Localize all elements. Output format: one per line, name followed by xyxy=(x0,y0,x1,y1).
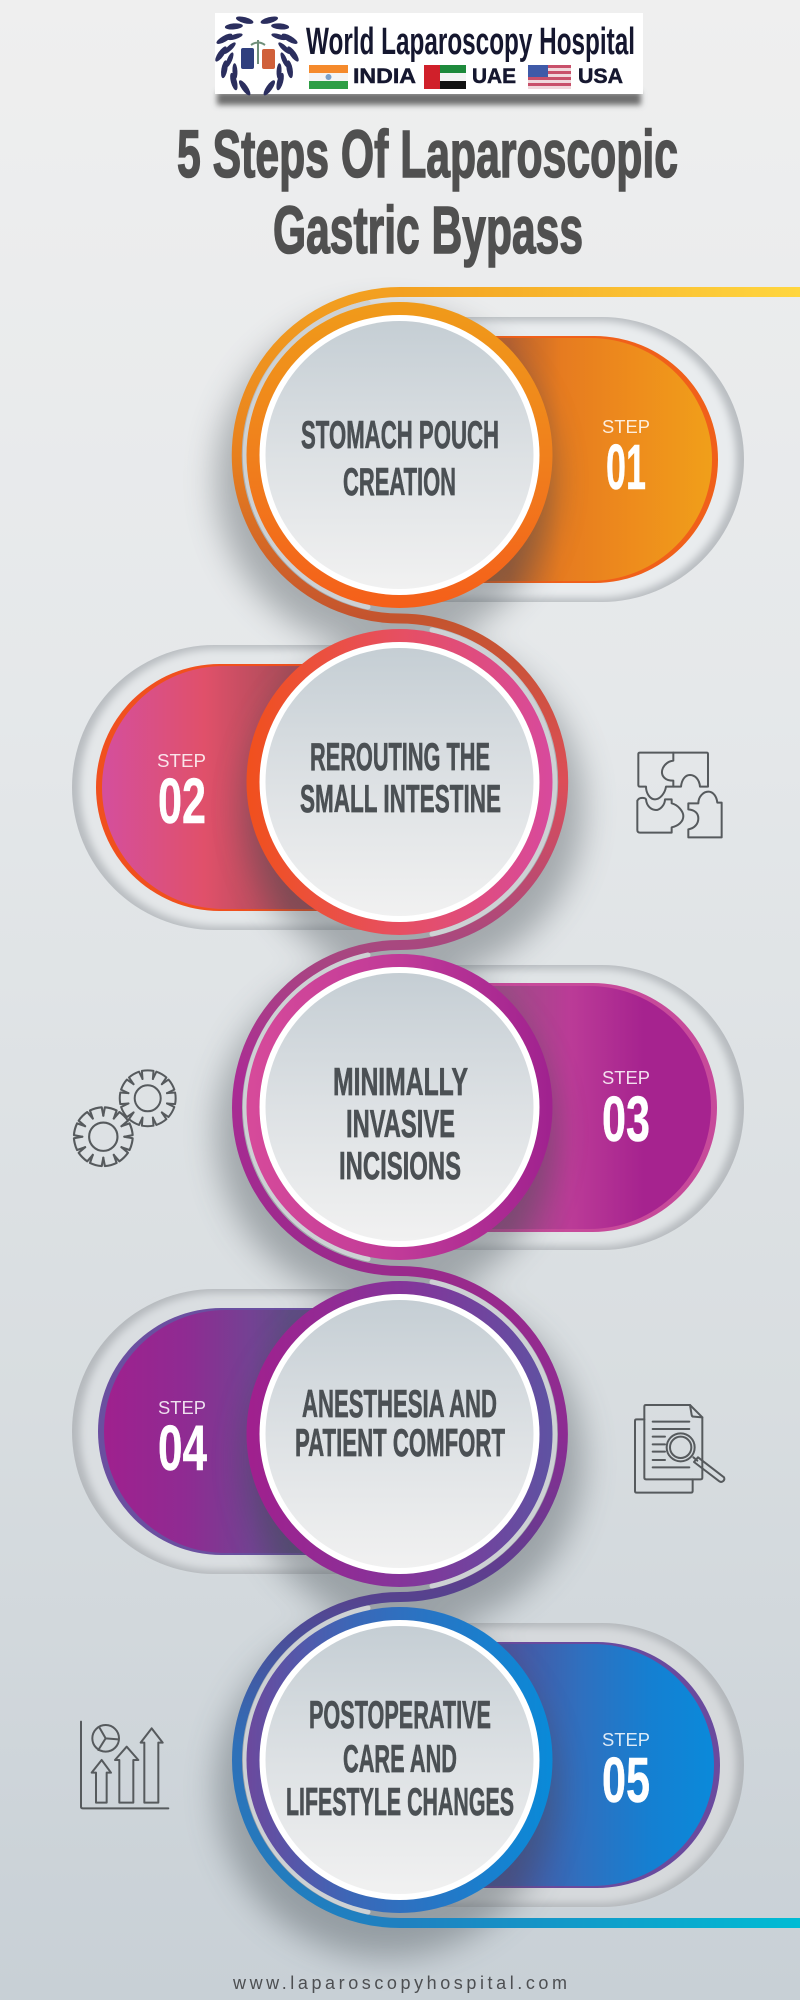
step 3 heading: INVASIVE xyxy=(346,1103,455,1146)
step 1 label xyxy=(602,417,650,503)
logo emblem xyxy=(213,15,301,97)
step 3 heading: MINIMALLY xyxy=(333,1061,468,1104)
step 4 label xyxy=(158,1398,207,1484)
connector band xyxy=(237,292,800,1923)
label: UAE: UAE xyxy=(472,65,516,88)
step 2 heading: SMALL INTESTINE xyxy=(300,778,501,821)
step 4 heading: PATIENT COMFORT xyxy=(295,1422,505,1465)
step 3 heading: INCISIONS xyxy=(339,1145,461,1188)
band inner highlight lines xyxy=(245,303,555,1912)
step 1 heading: CREATION xyxy=(343,461,456,504)
pill: step 2 xyxy=(72,645,516,930)
icon: growth chart xyxy=(81,1722,168,1808)
icon: gears xyxy=(73,1070,176,1167)
flag: India xyxy=(309,65,348,89)
step 4 label: 04 xyxy=(158,1412,207,1484)
circle shadows xyxy=(216,310,584,1958)
icon: puzzle xyxy=(637,753,722,837)
step 1 heading xyxy=(301,414,499,504)
step 4 heading: ANESTHESIA AND xyxy=(302,1383,497,1426)
pill: step 5 xyxy=(300,1623,744,1907)
step 2 label xyxy=(157,751,206,837)
logo banner xyxy=(213,13,643,105)
title xyxy=(177,117,678,268)
title: Gastric Bypass xyxy=(273,193,583,268)
step 5 circle xyxy=(246,1607,552,1913)
icon: document search xyxy=(635,1405,724,1493)
pill: step 3 xyxy=(300,965,744,1250)
step 3 circle xyxy=(246,954,552,1260)
step 5 label xyxy=(602,1730,650,1816)
step 5 heading: CARE AND xyxy=(343,1738,457,1781)
step 5 heading: POSTOPERATIVE xyxy=(309,1694,491,1737)
step 3 heading xyxy=(333,1061,468,1188)
pill: step 4 xyxy=(72,1289,516,1574)
footer url: www.laparoscopyhospital.com xyxy=(232,1973,567,1993)
step 3 label: STEP xyxy=(602,1068,650,1088)
step 4 label: STEP xyxy=(158,1398,206,1418)
step 2 label: STEP xyxy=(157,751,206,771)
step 1 label: STEP xyxy=(602,417,650,437)
step 5 heading xyxy=(286,1694,514,1824)
label: India: INDIA xyxy=(353,65,416,88)
pill: step 1 xyxy=(300,317,744,602)
flag: UAE xyxy=(424,65,466,89)
flag: USA xyxy=(528,65,571,89)
step 2 heading: REROUTING THE xyxy=(310,736,490,779)
step 4 circle xyxy=(246,1281,552,1587)
step 2 circle xyxy=(246,629,552,935)
step 1 heading: STOMACH POUCH xyxy=(301,414,499,457)
step 5 label: 05 xyxy=(602,1744,650,1816)
step 1 circle xyxy=(246,302,552,608)
step 2 label: 02 xyxy=(158,765,206,837)
step 2 heading xyxy=(300,736,501,821)
step 4 heading xyxy=(295,1383,505,1465)
step 5 label: STEP xyxy=(602,1730,650,1750)
step 1 label: 01 xyxy=(606,431,646,503)
step 5 heading: LIFESTYLE CHANGES xyxy=(286,1781,514,1824)
step 3 label: 03 xyxy=(602,1083,650,1155)
label: USA: USA xyxy=(578,65,623,88)
step 3 label xyxy=(602,1068,650,1155)
